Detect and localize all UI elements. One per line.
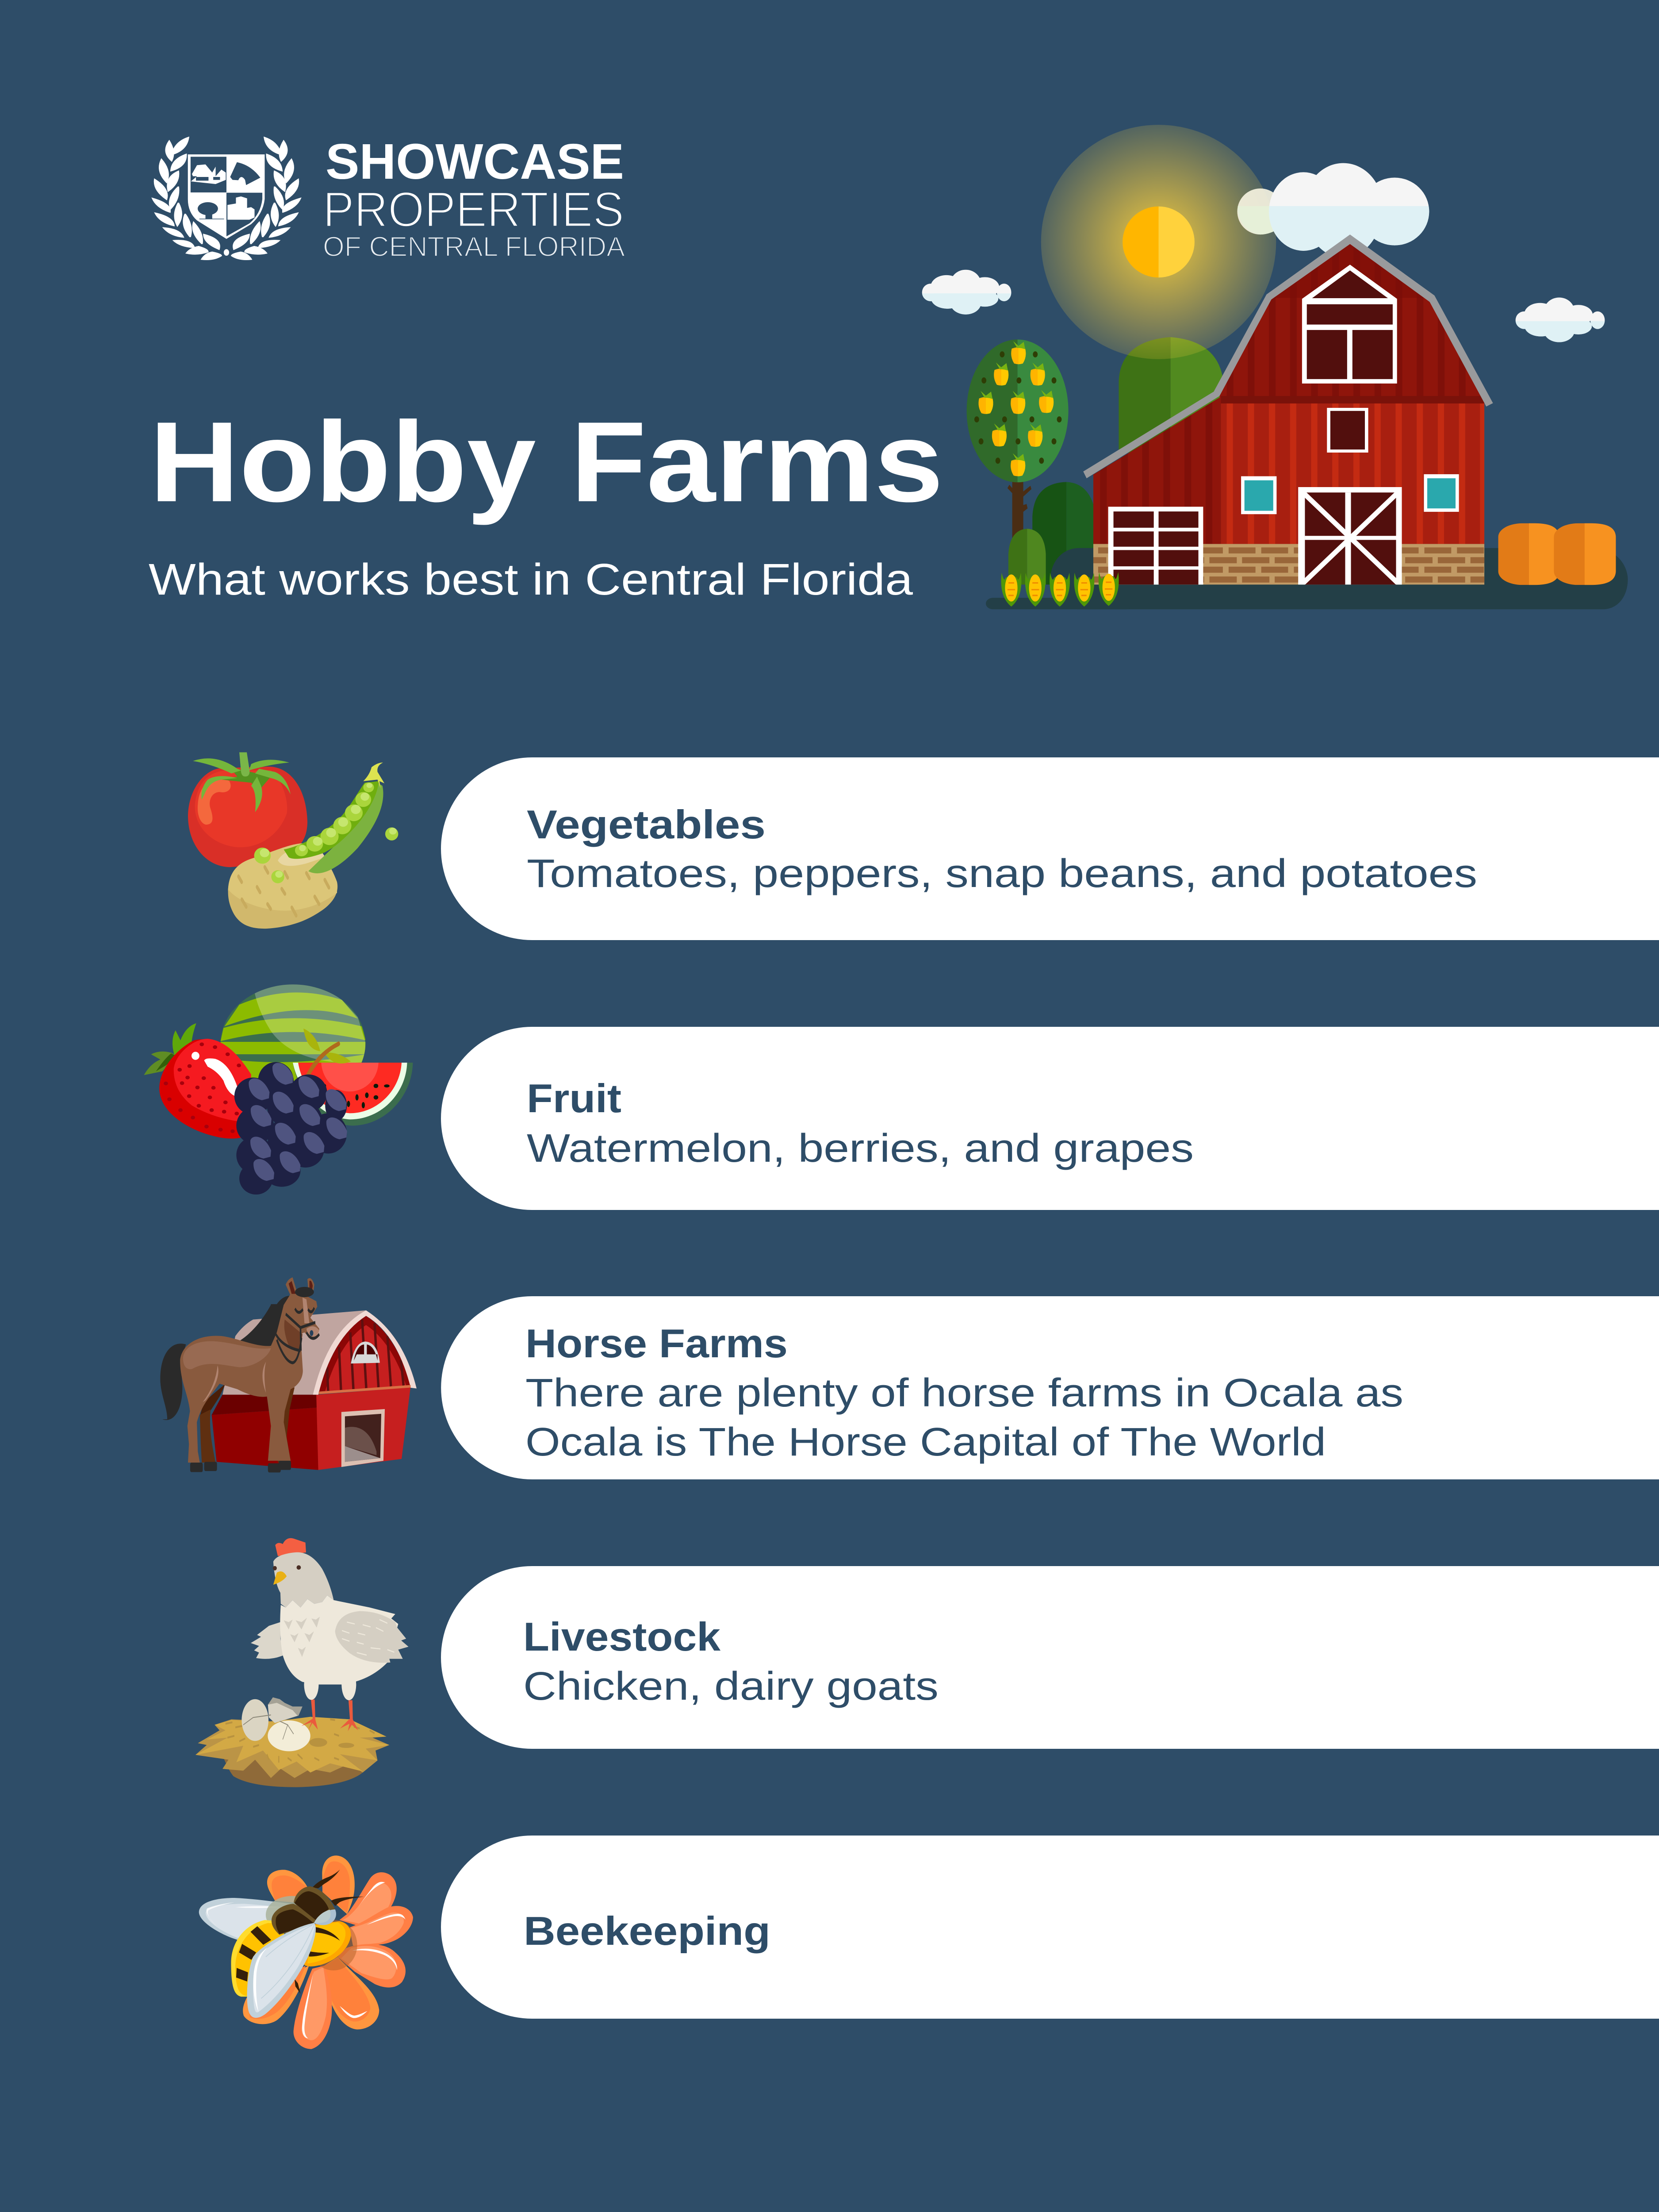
icon: hay bales <box>1498 523 1616 585</box>
barn side door <box>1108 507 1203 584</box>
stable <box>212 1310 417 1470</box>
icon: small bush <box>1008 529 1046 584</box>
barn window right <box>1424 474 1459 512</box>
icon: horse and stable <box>160 1277 417 1472</box>
icon: large cloud <box>1237 163 1429 252</box>
logo word: OF CENTRAL FLORIDA: OF CENTRAL FLORIDA <box>323 231 625 262</box>
icon: sun with glow <box>1041 125 1276 359</box>
panel background <box>441 1566 1659 1749</box>
illustration: farm scene with barn <box>922 125 1628 609</box>
heading: Beekeeping <box>524 1909 770 1954</box>
icon: fruit <box>144 984 413 1194</box>
strawberry <box>144 1023 255 1139</box>
panel: horse farms <box>441 1296 1659 1479</box>
icon: hen on nest <box>195 1538 409 1787</box>
nest <box>195 1717 389 1787</box>
icon: fruit tree <box>967 339 1069 541</box>
barn upper wall <box>1219 244 1484 403</box>
logo word: SHOWCASE: SHOWCASE <box>326 134 624 189</box>
barn main wall <box>1221 403 1484 544</box>
barn window left <box>1241 476 1276 514</box>
potato <box>228 843 337 929</box>
panel: beekeeping <box>441 1836 1659 2019</box>
panel: vegetables <box>441 757 1659 940</box>
icon: laurel crest <box>152 137 301 260</box>
heading: Horse Farms <box>525 1321 788 1366</box>
panel background <box>441 1836 1659 2019</box>
barn roof trim <box>1083 234 1493 478</box>
hen <box>251 1538 409 1731</box>
icon: small cloud right <box>1516 297 1605 342</box>
watermelon slice <box>293 1063 413 1125</box>
text block: Watermelon, berries, and grapes <box>527 1126 1194 1171</box>
barn loft door <box>1327 408 1368 453</box>
barn main door <box>1298 487 1402 584</box>
icon: dark bush <box>1032 482 1096 584</box>
icon: corn row <box>1001 572 1119 607</box>
text block: Chicken, dairy goats <box>523 1664 939 1709</box>
icon: vegetables <box>188 753 398 929</box>
barn lean-to wall <box>1093 397 1221 544</box>
icon: small cloud left <box>922 270 1011 315</box>
tomato <box>188 753 307 867</box>
icon: right laurel <box>231 137 301 260</box>
heading: Fruit <box>527 1076 621 1121</box>
icon: green bush behind barn <box>1119 337 1223 453</box>
icon: left laurel <box>152 137 222 260</box>
horse <box>160 1277 319 1472</box>
text line 2: Ocala is The Horse Capital of The World <box>525 1420 1326 1464</box>
panel background <box>441 1027 1659 1210</box>
panel: fruit <box>441 1027 1659 1210</box>
text block: Tomatoes, peppers, snap beans, and potatoes <box>527 852 1477 896</box>
barn attic window <box>1302 265 1397 384</box>
flower <box>243 1855 413 2049</box>
icon: ground shadow <box>986 548 1628 609</box>
panel: livestock <box>441 1566 1659 1749</box>
heading: Vegetables <box>527 803 766 847</box>
subtitle: What works best in Central Florida <box>149 555 913 604</box>
pea pod <box>254 763 398 883</box>
heading: Livestock <box>523 1615 720 1659</box>
text line 1: There are plenty of horse farms in Ocala as <box>525 1371 1403 1415</box>
icon: shield <box>188 154 264 239</box>
icon: bee on flower <box>199 1855 413 2049</box>
stem and leaves <box>303 1029 351 1076</box>
watermelon <box>220 984 365 1082</box>
logo: Showcase Properties of Central Florida <box>152 134 625 262</box>
title: Hobby Farms <box>149 398 943 526</box>
panel background <box>441 757 1659 940</box>
eggs <box>241 1697 310 1751</box>
grapes <box>234 1062 347 1194</box>
logo word: PROPERTIES: PROPERTIES <box>323 182 624 237</box>
barn brick base <box>1093 544 1484 584</box>
bee <box>199 1870 364 2018</box>
panel background <box>441 1296 1659 1479</box>
icon: red barn <box>1083 234 1493 584</box>
